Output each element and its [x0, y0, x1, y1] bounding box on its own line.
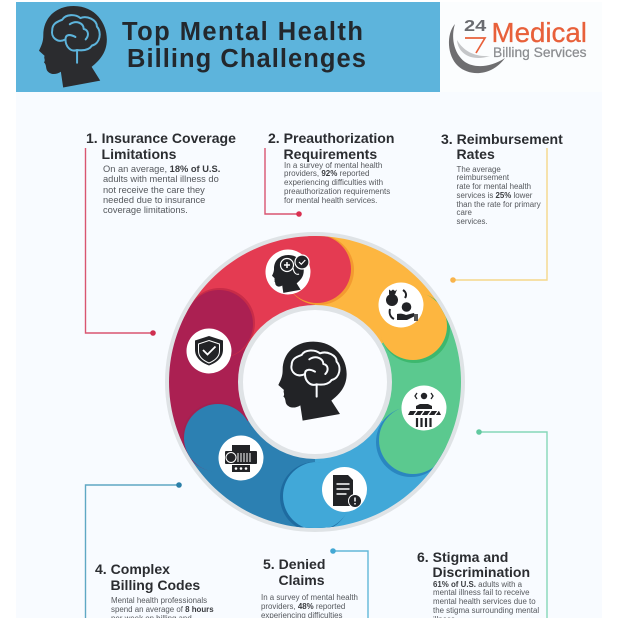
donut chart — [165, 232, 465, 532]
icon: header head with brain — [39, 6, 107, 88]
body 2: experiencing difficulties with — [284, 178, 383, 187]
heading 2: Requirements — [284, 146, 377, 162]
block 2: preauthorization — [268, 130, 394, 205]
body 2 — [284, 160, 390, 205]
icon: billing printer — [218, 436, 264, 480]
body 3: than the rate for primary — [456, 200, 541, 209]
block 1: insurance coverage — [86, 130, 236, 215]
body 6: 61% of U.S. adults with a — [433, 580, 522, 588]
logo text: Billing Services — [493, 45, 587, 60]
icon: people behind barrier — [402, 386, 446, 430]
body 6: mental health services due to — [433, 597, 536, 606]
body 2: providers, 92% reported — [284, 169, 369, 178]
title: Billing Challenges — [127, 44, 367, 72]
body 1 — [103, 164, 220, 215]
body 3 — [456, 164, 541, 226]
title — [122, 18, 367, 72]
heading 2 — [268, 130, 394, 162]
block 6: stigma — [417, 548, 539, 618]
heading 5: Claims — [278, 572, 325, 588]
body 6: mental illness fail to receive — [433, 588, 529, 597]
body 3: care — [456, 208, 472, 217]
logo swoosh — [449, 24, 505, 73]
body 2: for mental health services. — [284, 196, 377, 205]
body 1: needed due to insurance — [103, 195, 205, 205]
connector 6 — [476, 429, 547, 620]
heading 3: 3. Reimbursement — [441, 130, 563, 146]
body 3: services is 25% lower — [456, 191, 532, 200]
body 3: reimbursement — [456, 173, 509, 182]
body 1: adults with mental illness do — [103, 174, 219, 184]
icon: centre head with brain — [278, 342, 347, 421]
heading 5: 5. Denied — [263, 556, 325, 572]
header banner — [16, 2, 440, 92]
heading 4: Billing Codes — [110, 576, 200, 592]
body 2: In a survey of mental health — [284, 160, 382, 170]
body 4: spend an average of 8 hours — [111, 604, 214, 614]
connector 5 — [330, 548, 368, 620]
block 5: denied claims — [261, 556, 358, 618]
body 5: In a survey of mental health — [261, 592, 358, 602]
heading 4: 4. Complex — [95, 561, 170, 577]
heading 3: Rates — [456, 146, 495, 162]
body 2: preauthorization requirements — [284, 187, 390, 196]
connector 2 — [265, 148, 302, 217]
heading 6 — [417, 548, 530, 580]
heading 3 — [441, 130, 563, 162]
body 3: services. — [456, 217, 488, 226]
connector 4 — [86, 482, 182, 620]
heading 4 — [95, 561, 200, 593]
body 1: not receive the care they — [103, 185, 205, 195]
body 3: rate for mental health — [456, 182, 531, 191]
body 4: Mental health professionals — [111, 596, 207, 604]
icon: head with plus and check — [266, 250, 310, 294]
connector 1 — [86, 148, 156, 336]
body 1: coverage limitations. — [103, 205, 188, 215]
outer grey ring — [165, 232, 465, 532]
heading 6: 6. Stigma and — [417, 548, 508, 564]
body 3: The average — [456, 164, 501, 174]
heading 5 — [263, 556, 325, 588]
connector 3 — [450, 148, 547, 283]
logo text — [464, 17, 587, 60]
block 4: complex billing codes — [95, 561, 214, 618]
heading 6: Discrimination — [432, 564, 530, 580]
heading 2: 2. Preauthorization — [268, 130, 394, 146]
body 1: On an average, 18% of U.S. — [103, 164, 220, 174]
block 3: reimbursement — [441, 130, 563, 226]
coloured segments — [169, 236, 461, 528]
logo text: 24 — [464, 17, 486, 35]
body 5: providers, 48% reported — [261, 602, 345, 610]
icon: document with alert — [322, 467, 367, 512]
icon: money cycle — [378, 282, 424, 328]
heading 1 — [86, 130, 236, 162]
body 4 — [111, 596, 214, 618]
logo text: Medical — [492, 17, 587, 48]
body 5 — [261, 592, 358, 618]
centre circle — [240, 308, 390, 456]
title: Top Mental Health — [122, 18, 364, 46]
logo background — [440, 2, 602, 92]
body 6: the stigma surrounding mental — [433, 606, 539, 615]
heading 1: Limitations — [102, 146, 176, 162]
icon: shield with check — [186, 328, 232, 374]
body 6 — [433, 580, 539, 618]
heading 1: 1. Insurance Coverage — [86, 130, 236, 146]
